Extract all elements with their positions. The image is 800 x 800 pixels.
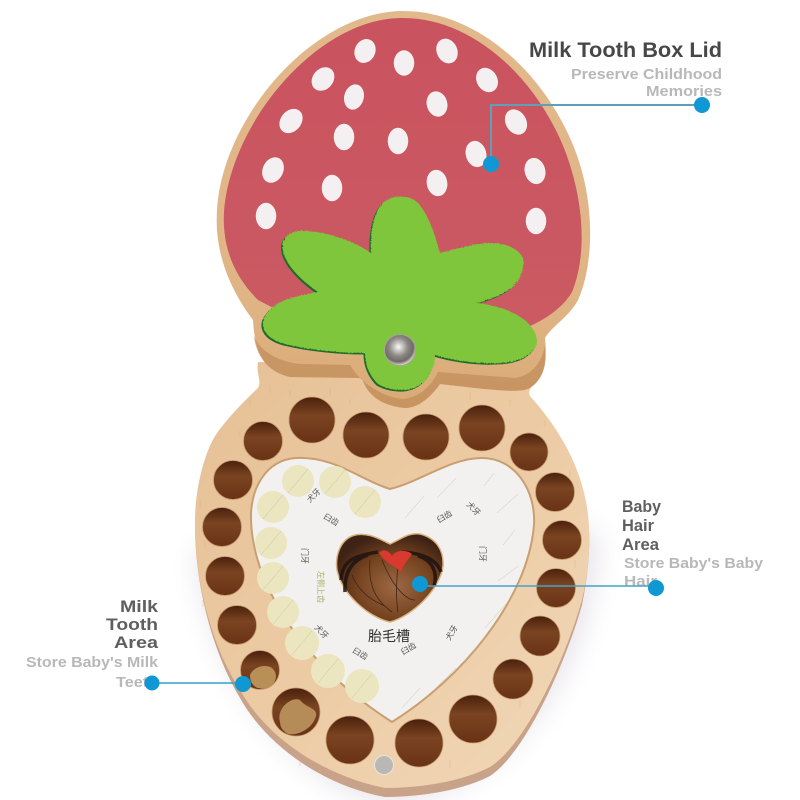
hair compartment	[337, 534, 443, 622]
heading: Milk	[120, 597, 159, 616]
heart tray	[251, 458, 534, 722]
callout: milk tooth area: Area	[114, 633, 159, 652]
tray labels: 犬牙	[465, 499, 483, 518]
panel: box base	[195, 362, 600, 800]
lid lip shade	[254, 336, 546, 408]
dots	[412, 576, 428, 592]
subtext: Store Baby's Baby	[624, 555, 764, 572]
tray labels: 臼齿	[435, 508, 454, 525]
metal stud	[384, 334, 416, 366]
holes	[202, 397, 582, 767]
felt leaf	[261, 196, 537, 392]
leader line	[152, 682, 243, 684]
dots	[144, 676, 160, 690]
baby teeth	[250, 666, 316, 734]
tooth circles	[255, 465, 381, 703]
tray labels: 门牙	[300, 548, 310, 564]
callout: milk tooth box lid: Memories	[646, 83, 722, 100]
magnet	[374, 756, 394, 774]
subtext: Store Baby's Milk	[26, 654, 159, 671]
callout: milk tooth box lid	[483, 39, 722, 172]
tray labels: 犬牙	[443, 623, 460, 642]
base shadow	[195, 512, 600, 800]
base side edge	[195, 530, 589, 797]
callout: baby hair area	[412, 497, 764, 596]
tray labels	[300, 486, 488, 662]
tray labels: 犬牙	[304, 486, 323, 504]
lid wood rim	[217, 11, 590, 408]
lid red face	[224, 18, 582, 326]
callout: baby hair area: Area	[622, 535, 660, 554]
heading: Baby	[622, 497, 662, 516]
callout: milk tooth area: Tooth	[106, 615, 158, 634]
leader line	[420, 585, 656, 587]
panel: strawberry lid	[217, 11, 590, 408]
tray labels: 臼齿	[399, 640, 418, 657]
tooth guide lines	[261, 469, 518, 708]
subtext: Preserve Childhood	[571, 66, 722, 83]
tray labels: 犬牙	[313, 622, 331, 641]
heading: Milk Tooth Box Lid	[529, 39, 722, 62]
leader line	[491, 105, 702, 164]
seeds	[256, 35, 548, 234]
tray labels: 臼齿	[351, 645, 370, 662]
dots	[483, 156, 499, 172]
wood grain	[200, 385, 575, 772]
tray labels: 胎毛槽	[368, 628, 410, 644]
tray labels: 门牙	[478, 546, 488, 562]
tray labels: 臼齿	[322, 511, 341, 528]
tray labels: 左侧上齿	[316, 571, 326, 603]
base top face	[195, 362, 589, 788]
callout: baby hair area: Hair	[622, 516, 654, 535]
callout: baby hair area: Hair	[624, 573, 657, 590]
callout: milk tooth area	[26, 597, 251, 692]
callout: milk tooth area: Teeth	[116, 674, 158, 691]
